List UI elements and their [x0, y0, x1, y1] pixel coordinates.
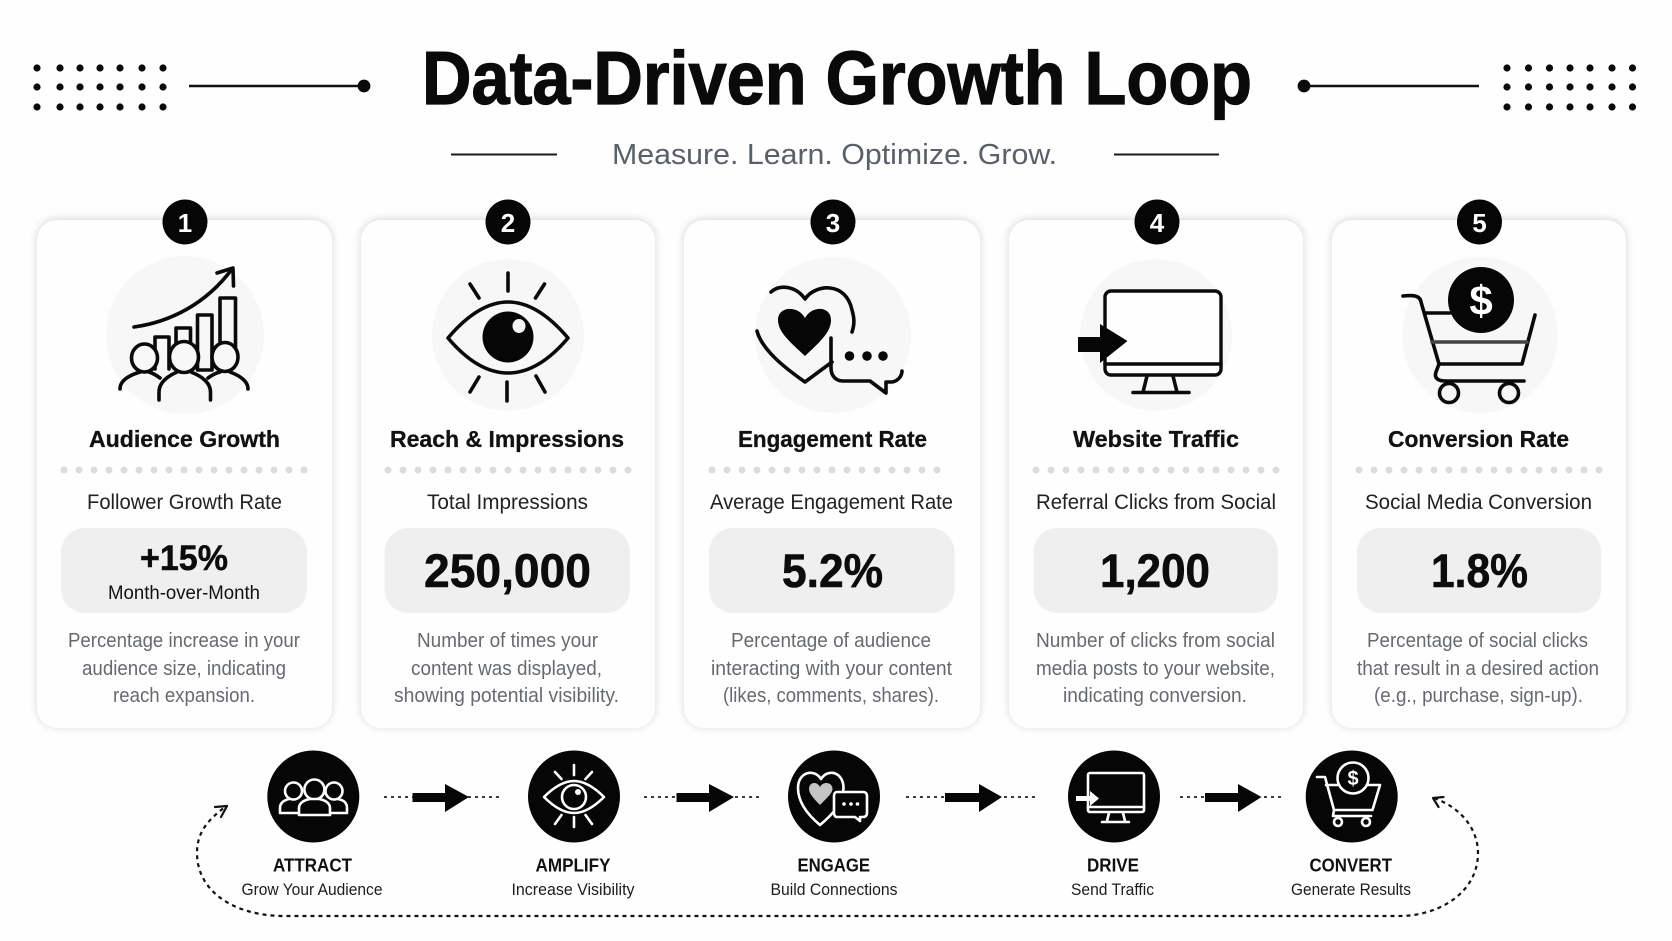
- description: [394, 630, 619, 707]
- icon: heart and chat in black circle: [788, 750, 880, 842]
- icon: shopping cart with dollar coin: $: [1469, 277, 1493, 324]
- card background: [37, 220, 332, 728]
- value box: 250,000: [424, 544, 591, 597]
- value box: [1357, 528, 1601, 613]
- number badge 4: 4: [1150, 208, 1165, 238]
- loop step: attract: [242, 750, 382, 899]
- icon: growth chart with people: [106, 256, 264, 414]
- description: [711, 630, 952, 707]
- card background: [684, 220, 980, 728]
- description: content was displayed,: [411, 658, 602, 680]
- heading: Website Traffic: [1073, 426, 1239, 452]
- label: ENGAGE: [798, 854, 870, 876]
- decoration: right line with dot: [1298, 80, 1479, 92]
- value box: [61, 528, 307, 613]
- number badge 3: 3: [826, 208, 840, 238]
- description: indicating conversion.: [1063, 685, 1247, 707]
- number badge 3: [810, 200, 856, 244]
- value box: [709, 528, 954, 613]
- description: media posts to your website,: [1036, 658, 1275, 680]
- card background: [1009, 220, 1303, 728]
- dotted divider: [712, 466, 952, 474]
- number badge 1: [162, 200, 208, 244]
- icon: shopping cart with dollar coin: [1402, 257, 1558, 413]
- description: Number of clicks from social: [1036, 630, 1275, 652]
- number badge 2: 2: [501, 208, 515, 238]
- description: (e.g., purchase, sign-up).: [1374, 685, 1583, 707]
- icon: cart in black circle: [1306, 750, 1398, 842]
- description: audience size, indicating: [82, 658, 286, 680]
- arrow: dashed feedback loop: [197, 797, 1478, 916]
- card background: [361, 220, 655, 728]
- arrow: attract to amplify: [384, 784, 501, 812]
- metric name: Social Media Conversion: [1365, 491, 1592, 514]
- subtitle rule: left: [451, 154, 557, 156]
- value box: +15%: [140, 539, 228, 578]
- value box: [384, 528, 630, 613]
- dotted divider: [1359, 466, 1601, 474]
- heading: Conversion Rate: [1388, 426, 1569, 452]
- caption: Build Connections: [770, 881, 898, 899]
- caption: Send Traffic: [1071, 881, 1154, 899]
- number badge 5: 5: [1472, 208, 1487, 238]
- metric name: Referral Clicks from Social: [1036, 491, 1276, 514]
- decoration: left line with dot: [189, 80, 370, 92]
- label: ATTRACT: [273, 854, 353, 876]
- arrow: drive to convert: [1180, 784, 1283, 812]
- number badge 1: 1: [178, 208, 192, 238]
- label: AMPLIFY: [536, 854, 611, 876]
- subtitle: Measure. Learn. Optimize. Grow.: [612, 139, 1057, 171]
- description: interacting with your content: [711, 658, 952, 680]
- description: Number of times your: [417, 630, 598, 652]
- icon: heart and chat bubble: [755, 257, 911, 413]
- number badge 5: [1457, 200, 1502, 244]
- arrow: amplify to engage: [644, 784, 763, 812]
- metric name: Total Impressions: [427, 491, 588, 514]
- description: Percentage of social clicks: [1367, 630, 1588, 652]
- loop step: amplify: [512, 750, 635, 899]
- card background: [1332, 220, 1626, 728]
- panel: reach and impressions: [361, 200, 655, 728]
- icon: monitor with arrow: [1078, 259, 1232, 411]
- description: [1036, 630, 1275, 707]
- caption: Grow Your Audience: [242, 881, 382, 899]
- caption: Generate Results: [1291, 881, 1411, 899]
- icon: people in black circle: [267, 750, 359, 842]
- value box: [1034, 528, 1278, 613]
- description: (likes, comments, shares).: [723, 685, 939, 707]
- decoration: left dot grid: [33, 64, 167, 111]
- value box: 5.2%: [782, 544, 883, 597]
- value box: 1,200: [1100, 544, 1210, 597]
- loop step: engage: [770, 750, 898, 899]
- value box: Month-over-Month: [108, 582, 260, 604]
- icon: monitor in black circle: [1068, 750, 1160, 842]
- heading: Audience Growth: [89, 426, 280, 452]
- panel: audience growth: [37, 200, 332, 728]
- subtitle rule: right: [1114, 154, 1219, 156]
- number badge 2: [486, 200, 530, 244]
- loop step: drive: [1068, 750, 1160, 899]
- arrow: engage to drive: [906, 784, 1036, 812]
- value box: 1.8%: [1431, 544, 1528, 597]
- icon: eye in black circle: [528, 750, 620, 842]
- label: DRIVE: [1087, 854, 1139, 876]
- metric name: Follower Growth Rate: [87, 491, 282, 514]
- description: showing potential visibility.: [394, 685, 619, 707]
- panel: conversion rate: [1332, 200, 1626, 728]
- icon: eye: [432, 259, 584, 411]
- number badge 4: [1134, 200, 1180, 244]
- label: CONVERT: [1310, 854, 1393, 876]
- heading: Reach & Impressions: [390, 426, 624, 452]
- caption: Increase Visibility: [512, 881, 635, 899]
- icon: cart in black circle: $: [1347, 768, 1359, 790]
- description: [68, 630, 300, 707]
- panel: engagement rate: [684, 200, 980, 728]
- metric name: Average Engagement Rate: [710, 491, 953, 514]
- dotted divider: [1036, 466, 1277, 474]
- dotted divider: [64, 466, 305, 474]
- panel: website traffic: [1009, 200, 1303, 728]
- title: Data-Driven Growth Loop: [422, 36, 1252, 120]
- dotted divider: [388, 466, 629, 474]
- loop step: convert: [1291, 750, 1411, 899]
- description: Percentage of audience: [731, 630, 931, 652]
- description: Percentage increase in your: [68, 630, 300, 652]
- description: reach expansion.: [113, 685, 255, 707]
- description: [1357, 630, 1599, 707]
- decoration: right dot grid: [1503, 64, 1636, 111]
- description: that result in a desired action: [1357, 658, 1599, 680]
- heading: Engagement Rate: [738, 426, 927, 452]
